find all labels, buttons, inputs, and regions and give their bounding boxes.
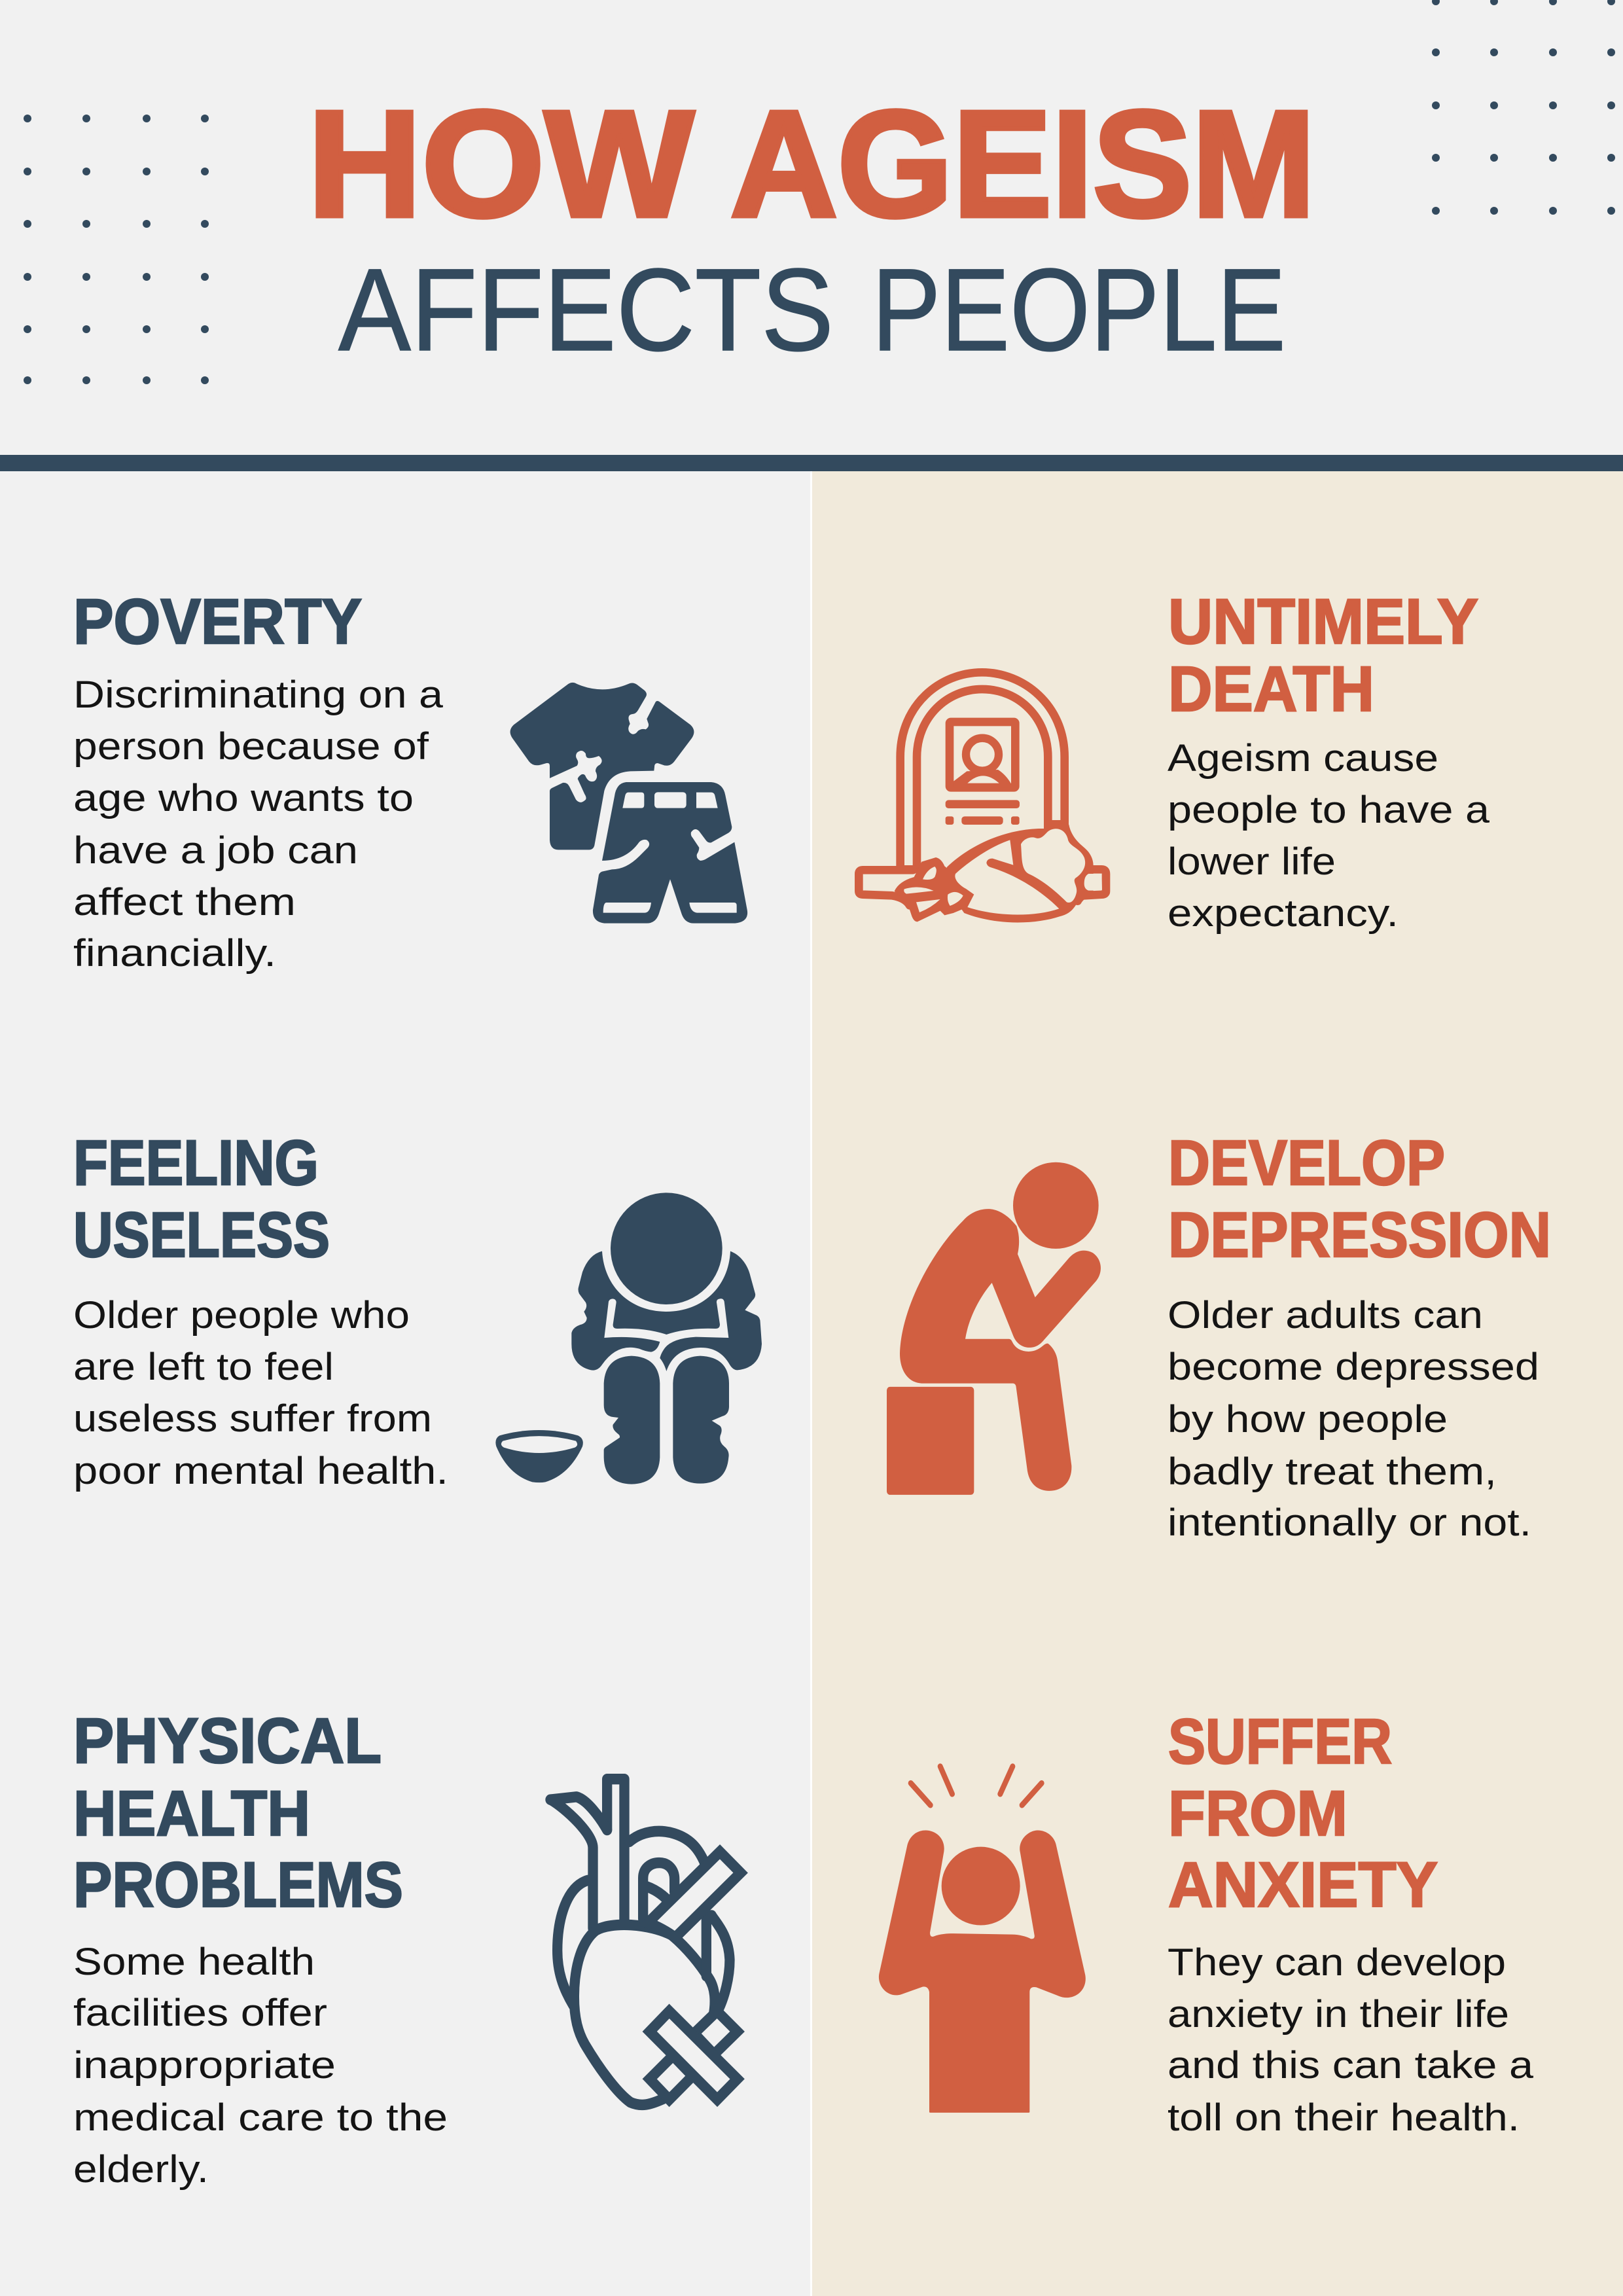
panel: right cream column (812, 471, 1623, 2296)
text block: develop depression: by how people (1168, 1398, 1448, 1441)
dot pattern: left (24, 115, 209, 384)
panel: develop depression (887, 1127, 1551, 1544)
heading: suffer from anxiety: FROM (1168, 1778, 1347, 1849)
heading: untimely death: DEATH (1168, 653, 1374, 725)
text block: feeling useless: Older people who (73, 1294, 410, 1336)
title (308, 79, 1315, 375)
text block: develop depression: become depressed (1168, 1346, 1539, 1388)
dot pattern: right (1432, 0, 1615, 215)
title: AFFECTS (338, 244, 834, 375)
text block: physical health problems: facilities offer (73, 1992, 327, 2034)
heading: feeling useless: USELESS (73, 1199, 330, 1270)
title: PEOPLE (872, 244, 1286, 375)
heading: untimely death: UNTIMELY (1168, 586, 1478, 657)
icon: ragged shirt and shorts (510, 683, 747, 924)
text block: untimely death: expectancy. (1168, 892, 1399, 935)
text block: suffer from anxiety: and this can take a (1168, 2044, 1534, 2087)
title: HOW (308, 79, 694, 248)
text block: physical health problems (73, 1941, 448, 2191)
text block: suffer from anxiety: They can develop (1168, 1941, 1506, 1984)
icon: anxious person holding head (879, 1767, 1086, 2113)
text block: physical health problems: inappropriate (73, 2044, 336, 2087)
icon: sitting person with begging bowl (495, 1193, 762, 1484)
text block: physical health problems: elderly. (73, 2148, 209, 2191)
panel: untimely death (859, 586, 1490, 935)
heading: physical health problems: PROBLEMS (73, 1849, 403, 1920)
text block: physical health problems: medical care to the (73, 2096, 448, 2139)
text block: untimely death: lower life (1168, 840, 1336, 883)
heading: develop depression: DEVELOP (1168, 1127, 1445, 1198)
text block: poverty: Discriminating on a (73, 673, 444, 716)
heading: physical health problems (73, 1705, 403, 1920)
heading: physical health problems: HEALTH (73, 1778, 310, 1849)
header rule (0, 455, 1623, 471)
text block: poverty: financially. (73, 932, 276, 975)
text block: physical health problems: Some health (73, 1941, 315, 1983)
text block: feeling useless: poor mental health. (73, 1450, 448, 1492)
heading: feeling useless: FEELING (73, 1127, 319, 1198)
panel: physical health problems (73, 1705, 741, 2191)
heading: suffer from anxiety (1168, 1706, 1438, 1920)
heading: suffer from anxiety: ANXIETY (1168, 1849, 1438, 1920)
text block: poverty: affect them (73, 881, 296, 924)
text block: untimely death: people to have a (1168, 789, 1490, 831)
text block: develop depression: intentionally or not. (1168, 1501, 1531, 1544)
text block: untimely death: Ageism cause (1168, 737, 1438, 780)
text block: poverty: person because of (73, 725, 429, 768)
text block: feeling useless: useless suffer from (73, 1397, 432, 1440)
icon: gravestone with flowers (859, 672, 1106, 922)
text block: suffer from anxiety (1168, 1941, 1534, 2139)
icon: bandaged heart (550, 1779, 741, 2105)
text block: develop depression: badly treat them, (1168, 1450, 1497, 1493)
text block: suffer from anxiety: toll on their health. (1168, 2096, 1520, 2139)
text block: poverty (73, 673, 444, 975)
panel: feeling useless (73, 1127, 762, 1492)
heading: develop depression: DEPRESSION (1168, 1199, 1551, 1270)
heading: feeling useless (73, 1127, 330, 1270)
heading: physical health problems: PHYSICAL (73, 1705, 382, 1776)
text block: poverty: have a job can (73, 829, 358, 872)
heading: suffer from anxiety: SUFFER (1168, 1706, 1392, 1777)
text block: poverty: age who wants to (73, 777, 414, 819)
heading: untimely death (1168, 586, 1478, 725)
text block: suffer from anxiety: anxiety in their life (1168, 1993, 1509, 2036)
text block: feeling useless (73, 1294, 448, 1492)
panel: suffer from anxiety (879, 1706, 1534, 2139)
column divider (810, 471, 812, 2296)
panel: poverty (73, 586, 747, 975)
text block: untimely death (1168, 737, 1490, 935)
text block: feeling useless: are left to feel (73, 1346, 334, 1388)
heading: poverty: POVERTY (73, 586, 362, 657)
icon: depressed person sitting (887, 1162, 1101, 1495)
text block: develop depression (1168, 1294, 1539, 1544)
text block: develop depression: Older adults can (1168, 1294, 1483, 1336)
title: AGEISM (730, 79, 1315, 248)
heading: develop depression (1168, 1127, 1551, 1270)
